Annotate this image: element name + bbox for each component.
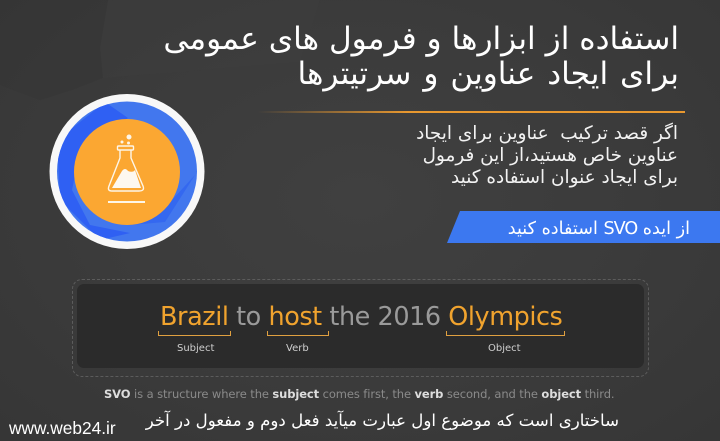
verb bracket xyxy=(267,331,329,336)
object label: Object xyxy=(488,343,521,354)
subject bracket xyxy=(158,331,231,336)
banner text: از ایده SVO استفاده کنید xyxy=(508,219,690,239)
website url: www.web24.ir xyxy=(9,418,116,438)
title divider xyxy=(258,111,685,113)
subject label: Subject xyxy=(177,343,214,354)
persian explanation: ساختاری است که موضوع اول عبارت میآید فعل دوم و مفعول در آخر xyxy=(146,411,619,430)
description text: برای ایجاد عنوان استفاده کنید xyxy=(451,167,678,188)
title: برای ایجاد عناوین و سرتیترها xyxy=(297,56,679,92)
description text: اگر قصد ترکیب عناوین برای ایجاد xyxy=(416,123,678,144)
object bracket xyxy=(446,331,565,336)
description text: عناوین خاص هستید،از این فرمول xyxy=(423,145,678,166)
svo explanation: SVO is a structure where the subject comes first, the verb second, and the object third. xyxy=(104,387,614,401)
description text xyxy=(416,122,678,188)
title: استفاده از ابزارها و فرمول های عمومی xyxy=(163,21,679,57)
example sentence: Brazil to host the 2016 Olympics xyxy=(160,302,562,332)
icon: flask badge xyxy=(50,94,204,249)
verb label: Verb xyxy=(286,343,309,354)
title xyxy=(163,21,679,92)
example panel xyxy=(72,279,649,377)
